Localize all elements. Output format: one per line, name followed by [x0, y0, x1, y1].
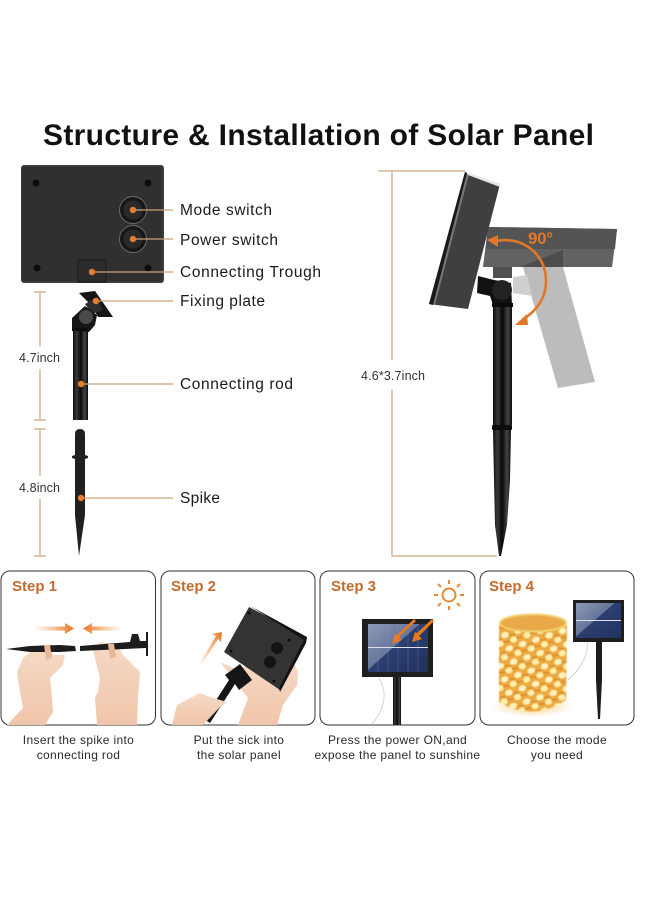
step 3 caption: expose the panel to sunshine [315, 748, 480, 762]
step 1 panel [1, 571, 156, 725]
step 3 caption: Press the power ON,and [328, 733, 467, 747]
callout labels: Fixing plate [180, 293, 265, 310]
step 2 panel: Step 2 [171, 578, 216, 595]
ghost panel lowered [523, 267, 595, 388]
step 1 panel: Step 1 [12, 578, 57, 595]
callout labels: Connecting rod [180, 376, 293, 393]
wire [568, 640, 587, 680]
step 4 panel: Step 4 [489, 578, 535, 595]
callout labels: Mode switch [180, 202, 272, 219]
dimension: panel size: 4.6*3.7inch [361, 369, 425, 383]
callout labels: Connecting Trough [180, 264, 321, 281]
side view with panel rotation [361, 171, 617, 556]
step 2 caption: the solar panel [197, 748, 281, 762]
90 degree label: 90° [528, 229, 553, 248]
step 4 panel [480, 571, 634, 725]
left hand [7, 645, 65, 725]
tilted solar panel [429, 172, 500, 309]
dimension: connecting rod height: 4.7inch [19, 351, 60, 365]
right hand [220, 660, 298, 725]
insert arrows [34, 623, 122, 634]
rotated panel [224, 606, 307, 692]
step 1 caption: connecting rod [37, 748, 120, 762]
fixing plate and connecting rod [72, 291, 113, 420]
sun icon [434, 580, 464, 610]
dimension: spike height: 4.8inch [19, 481, 60, 495]
callout labels [180, 202, 321, 507]
solar panel front [362, 619, 433, 677]
step 2 caption: Put the sick into [194, 733, 284, 747]
up arrow [199, 632, 222, 666]
string lights coil [492, 614, 572, 717]
rotation arrow [487, 235, 546, 325]
fingers [44, 644, 116, 660]
spike and rod [6, 645, 76, 652]
stake [477, 276, 513, 556]
callout labels: Spike [180, 490, 220, 507]
step 4 caption: you need [531, 748, 583, 762]
solar panel back [21, 165, 164, 283]
right hand [93, 642, 140, 725]
spike [72, 429, 88, 556]
step 3 panel: Step 3 [331, 578, 376, 595]
callout leader lines [81, 210, 173, 498]
step 3 panel [320, 571, 475, 725]
post [393, 676, 401, 725]
lower hand [172, 693, 227, 725]
step 1 caption: Insert the spike into [23, 733, 134, 747]
ghost panel horizontal [483, 227, 617, 267]
step 4 caption: Choose the mode [507, 733, 607, 747]
title: Structure & Installation of Solar Panel [43, 119, 594, 152]
solar panel [573, 600, 624, 642]
wire [372, 678, 384, 724]
step 2 panel [161, 571, 315, 725]
dimension: spike height [19, 429, 60, 556]
stake [596, 641, 602, 719]
dimension: panel size [361, 171, 497, 556]
callout labels: Power switch [180, 232, 278, 249]
panel back view with callouts [21, 165, 321, 556]
callout dots [78, 207, 136, 501]
sun ray arrows [392, 619, 434, 644]
stake in hand [204, 664, 252, 723]
dimension: connecting rod height [19, 292, 60, 420]
